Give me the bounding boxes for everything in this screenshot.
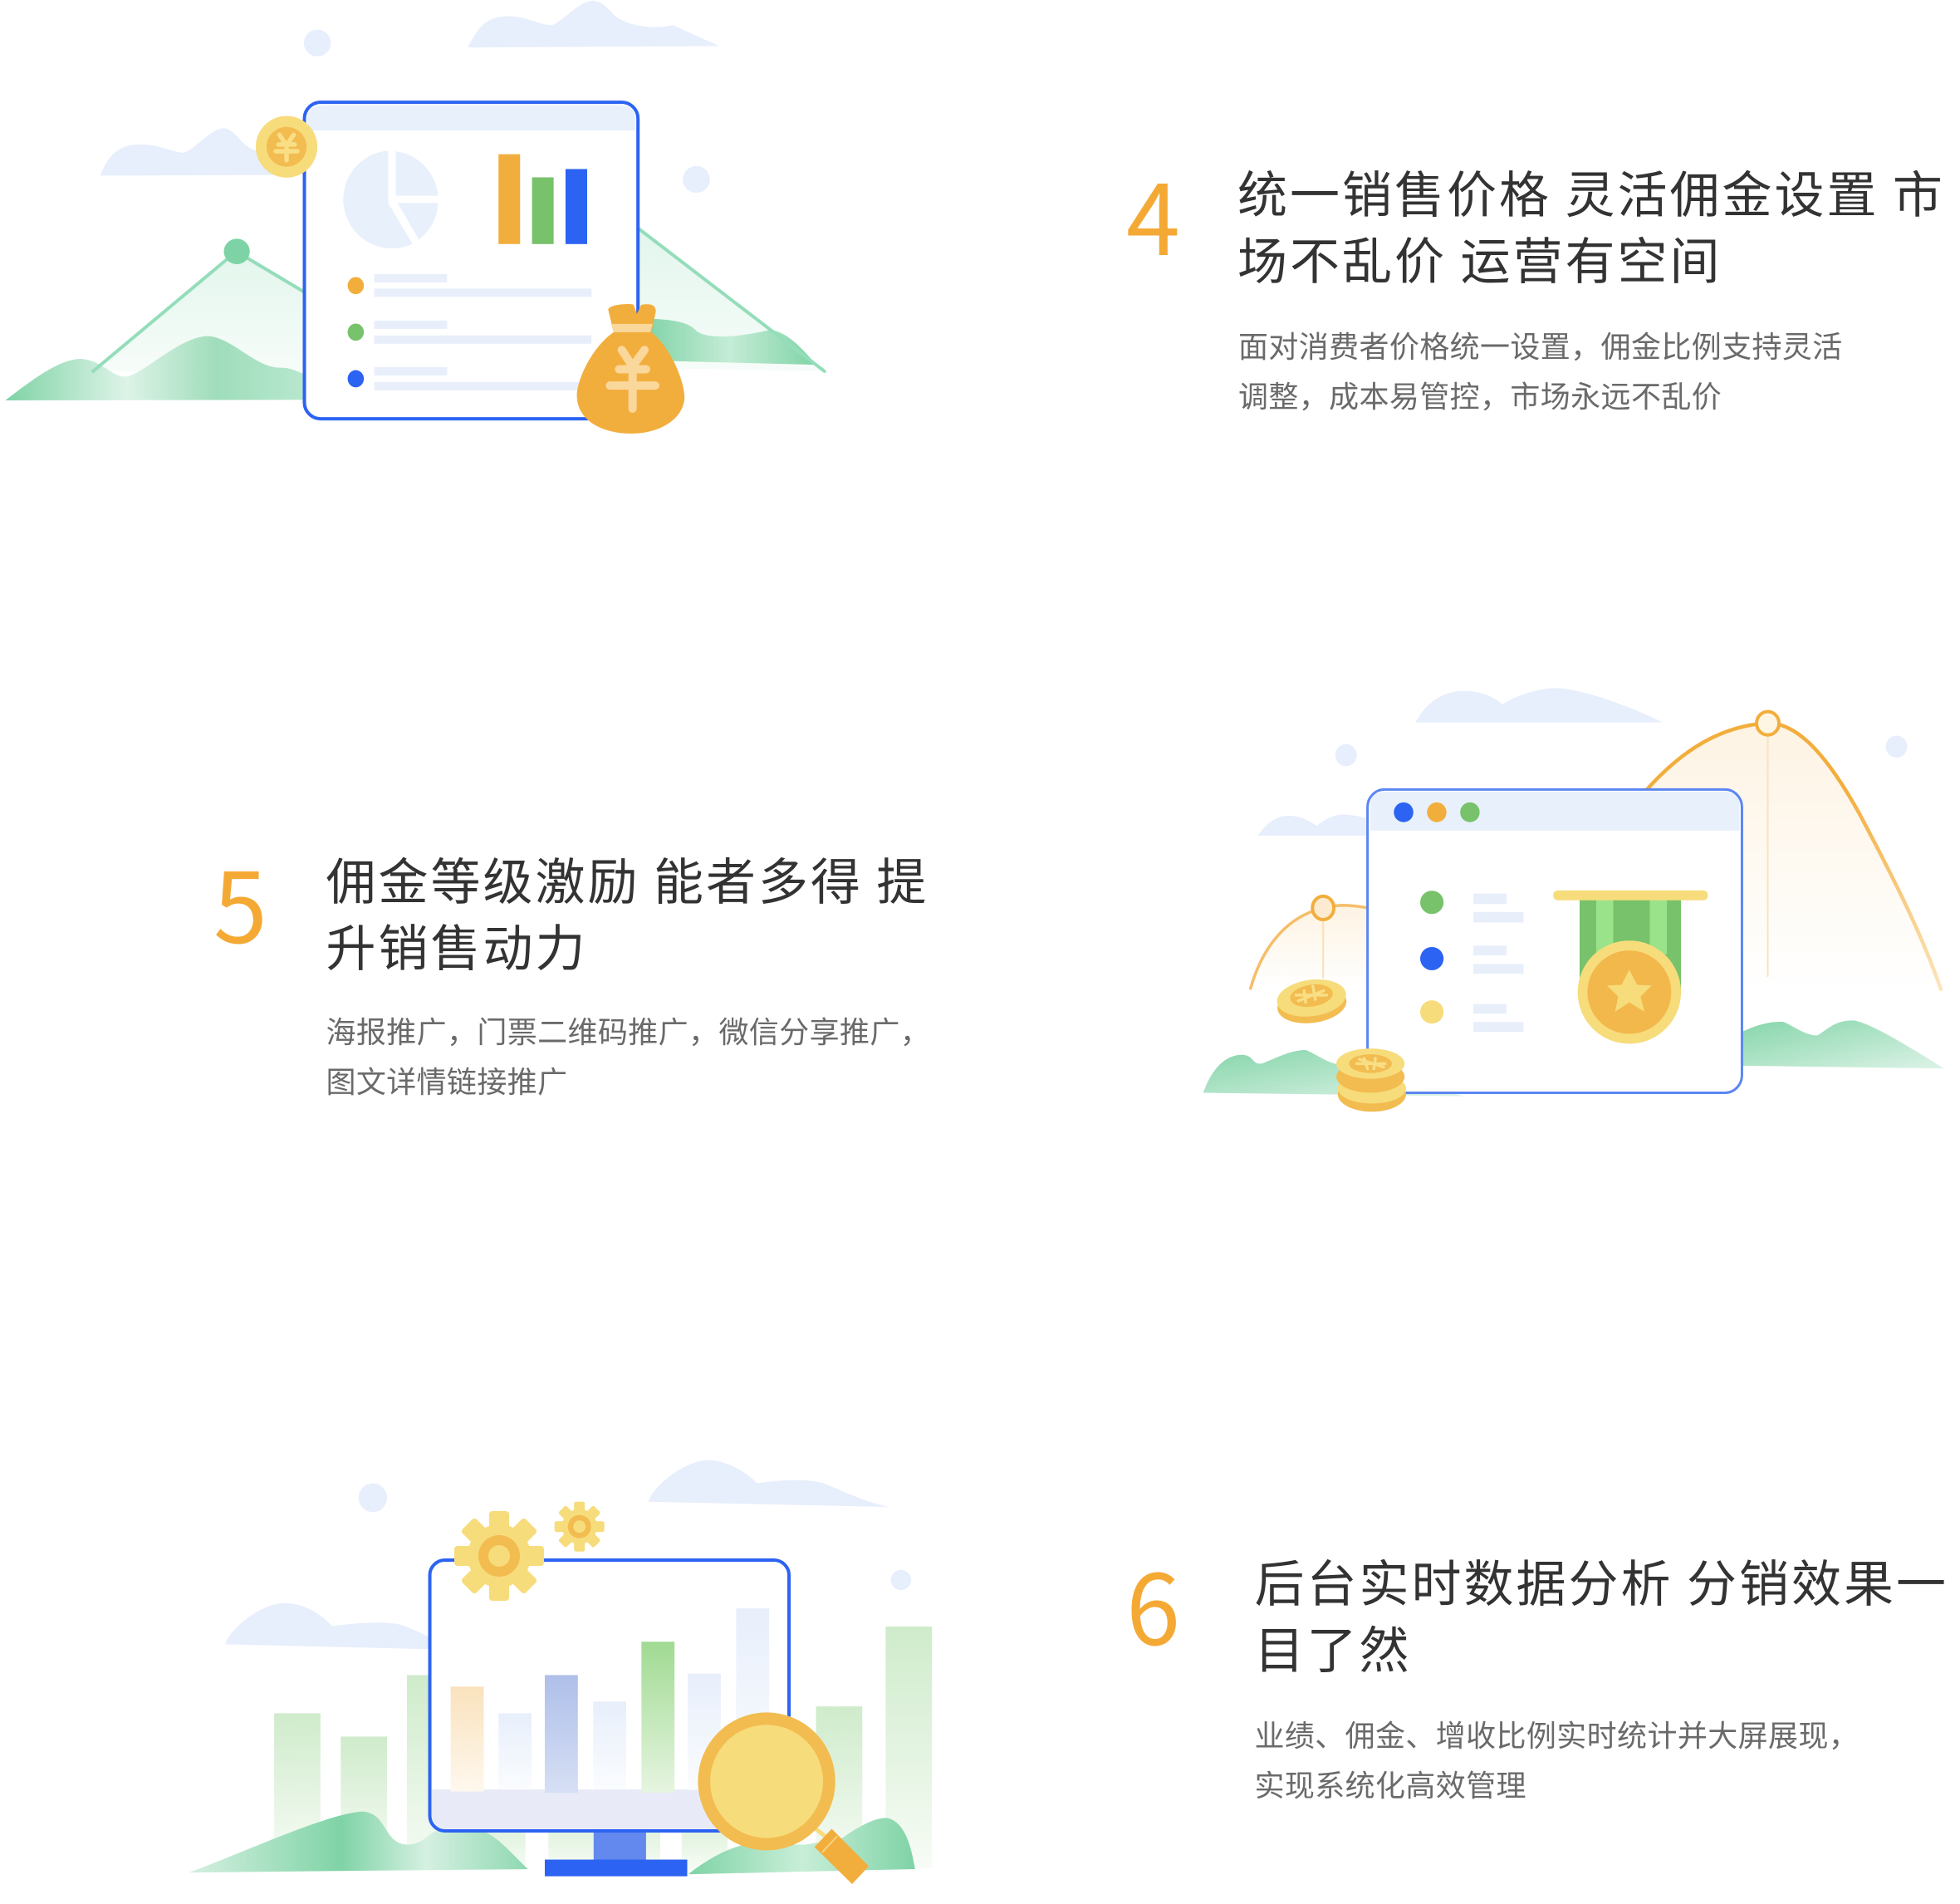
icon: medal xyxy=(1553,891,1708,1043)
hill: right xyxy=(644,319,816,365)
dot: top left xyxy=(304,30,331,56)
mountain: left triangle fill xyxy=(93,252,305,371)
description 6: 业绩、佣金、增收比例实时统计并大屏展现， xyxy=(1254,1712,1859,1755)
hill: left xyxy=(6,336,308,400)
mountain: right triangle fill xyxy=(638,228,825,371)
monitor xyxy=(430,1560,789,1831)
report card xyxy=(305,102,638,419)
heading 6: 目了然 xyxy=(1254,1611,1412,1683)
background bars xyxy=(274,1627,932,1871)
hill: right xyxy=(688,1818,915,1874)
hill: right xyxy=(1737,1020,1944,1068)
cloud: top xyxy=(1415,688,1663,723)
icon: tilted coin xyxy=(1266,972,1358,1031)
number 4: 4 xyxy=(1126,142,1180,283)
window xyxy=(1368,789,1742,1092)
icon: large gear xyxy=(454,1511,544,1601)
list rows xyxy=(348,274,591,390)
mountain: right outline xyxy=(639,229,825,371)
hill: left xyxy=(1203,1050,1464,1097)
description 4: 面对消费者价格统一设置，佣金比例支持灵活 xyxy=(1238,323,1843,366)
hill: left xyxy=(189,1812,528,1872)
description 6: 实现系统化高效管理 xyxy=(1254,1762,1526,1805)
dot: right xyxy=(891,1570,911,1590)
cloud: left xyxy=(1258,814,1371,836)
pie chart xyxy=(343,150,438,248)
description 5: 海报推广，门票二维码推广，微信分享推广， xyxy=(326,1008,930,1052)
number 6: 6 xyxy=(1126,1532,1180,1673)
description 4: 调整，成本易管控，市场永远不乱价 xyxy=(1238,373,1722,416)
heading 5: 佣金等级激励 能者多得 提 xyxy=(326,842,929,915)
bar chart xyxy=(498,155,587,244)
mountain: left outline xyxy=(93,252,305,371)
bar chart xyxy=(451,1608,769,1793)
icon: yuan coin xyxy=(256,116,317,178)
illustration: medal window with coins xyxy=(1203,688,1944,1111)
heading 6: 后台实时数据分析 分销效果一 xyxy=(1254,1544,1948,1617)
mountain: large orange xyxy=(1647,712,1941,989)
dot: right xyxy=(1886,735,1907,758)
number 5: 5 xyxy=(213,830,267,971)
text block: feature 5 xyxy=(213,830,930,1102)
illustration: monitor dashboard with magnifier xyxy=(189,1460,932,1884)
illustration: report card with money bag xyxy=(6,1,825,434)
window buttons xyxy=(1394,802,1480,822)
dot: top left xyxy=(359,1484,387,1512)
text block: feature 6 xyxy=(1126,1532,1948,1805)
cloud: top xyxy=(468,1,719,47)
dot: right xyxy=(683,166,710,193)
cloud: top right xyxy=(649,1460,889,1507)
cloud: left xyxy=(225,1603,434,1649)
mountain: small orange xyxy=(1251,896,1371,989)
icon: coin stack xyxy=(1336,1048,1406,1111)
peak marker xyxy=(224,238,250,264)
list rows xyxy=(1420,891,1523,1032)
heading 4: 场不乱价 运营有空间 xyxy=(1237,222,1722,294)
icon: magnifier xyxy=(698,1712,869,1884)
heading 5: 升销售动力 xyxy=(326,909,588,981)
text block: feature 4 xyxy=(1126,142,1945,416)
cloud: left xyxy=(100,128,276,175)
heading 4: 统一销售价格 灵活佣金设置 市 xyxy=(1237,155,1945,228)
description 5: 图文详情链接推广 xyxy=(326,1058,568,1102)
icon: small gear xyxy=(555,1502,605,1552)
monitor stand xyxy=(545,1830,688,1877)
dot: left xyxy=(1335,744,1357,766)
icon: money bag xyxy=(577,304,684,434)
